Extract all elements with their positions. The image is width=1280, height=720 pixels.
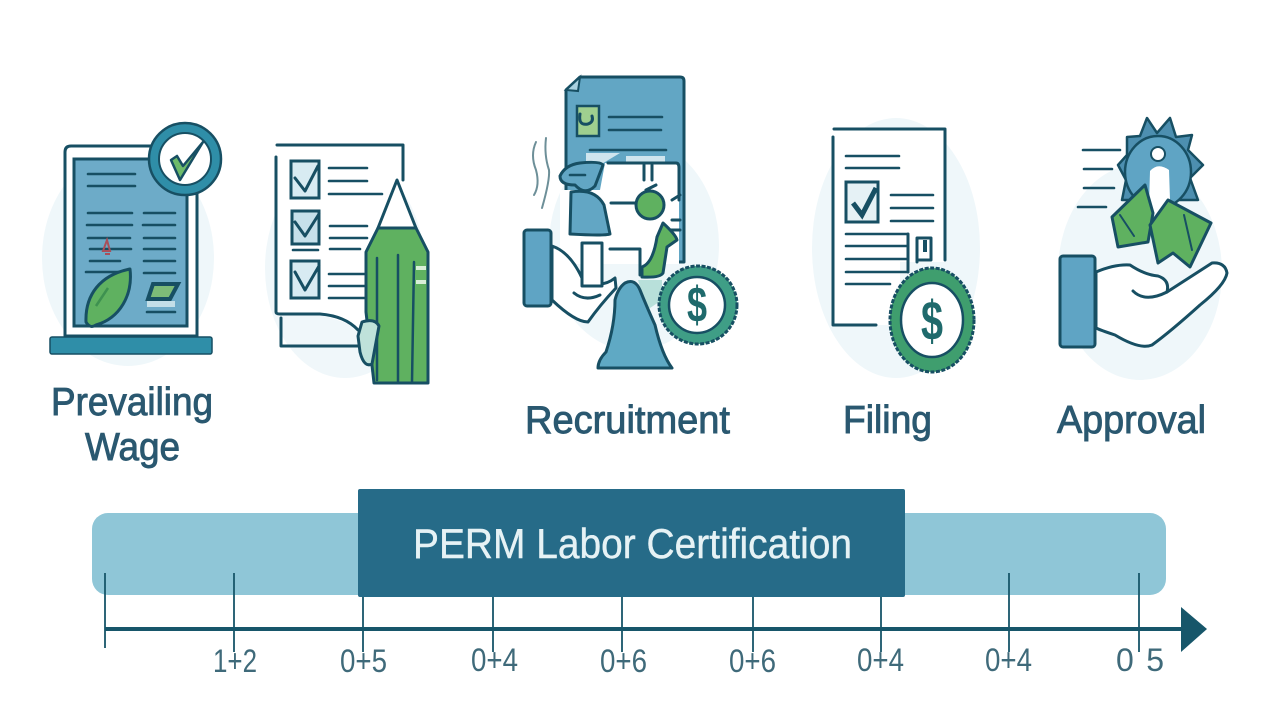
icon: filing document [812, 118, 980, 378]
icon: dollar coin: $ [687, 277, 707, 333]
icon: dollar coin [659, 266, 737, 344]
icon: prevailing wage laptop [42, 123, 221, 366]
icon: dollar coin [890, 268, 974, 372]
icon: approval hand with seal [1058, 118, 1227, 380]
icon: dollar coin: $ [921, 289, 943, 352]
icon: checklist and pencil [265, 145, 428, 383]
icon: leaf [86, 269, 130, 326]
icon: recruitment [524, 77, 737, 368]
timeline band [92, 513, 1166, 595]
timeline labels: 0 5 [1116, 642, 1164, 678]
timeline labels [213, 642, 1164, 679]
figure: person in green [636, 185, 677, 277]
timeline ticks and axis [105, 573, 1207, 652]
timeline labels: 0+4 [471, 642, 518, 678]
icon: pencil [358, 180, 428, 383]
timeline labels: 0+4 [985, 642, 1032, 678]
timeline labels: 0+5 [340, 643, 387, 679]
banner: PERM Labor Certification: PERM Labor Certification [413, 520, 852, 567]
icon: check badge [149, 123, 221, 195]
banner: PERM Labor Certification [358, 489, 905, 597]
heading: Approval: Approval [1057, 399, 1206, 442]
heading: Prevailing Wage [51, 381, 213, 469]
heading: Recruitment: Recruitment [525, 399, 730, 442]
timeline labels: 0+6 [600, 643, 647, 679]
heading: Prevailing Wage: Wage [85, 426, 180, 469]
figure: person in blue [560, 162, 610, 235]
arrow [1181, 607, 1207, 652]
heading: Filing: Filing [843, 399, 932, 442]
timeline labels: 0+4 [857, 642, 904, 678]
heading: Prevailing Wage: Prevailing [51, 381, 213, 424]
icon: green leaves [1112, 185, 1211, 267]
timeline labels: 0+6 [729, 643, 776, 679]
icon: seal [1118, 118, 1203, 218]
timeline labels: 1+2 [213, 643, 257, 679]
